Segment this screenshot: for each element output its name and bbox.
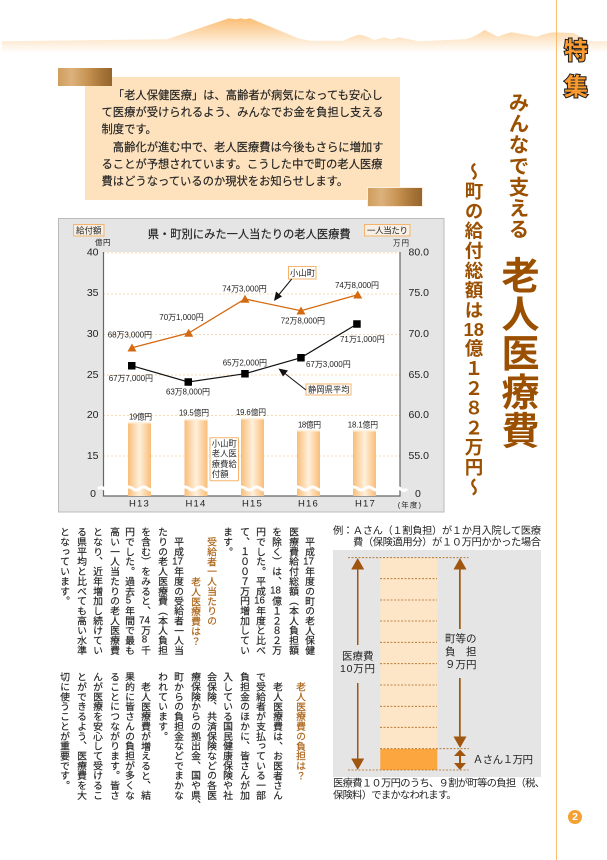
left axis labels: 35 (87, 287, 99, 299)
paragraph: 給付総額: を除く）は、 18 億１２８２万 (270, 527, 281, 655)
axis break marks (98, 487, 407, 490)
right axis legend: 一人当たり (364, 224, 410, 248)
bar value labels: 19億円 (129, 412, 152, 422)
mountain header band (2, 18, 607, 50)
data labels: 71万1,000円 (340, 335, 385, 344)
left axis labels: 25 (87, 369, 99, 381)
x axis labels: H16 (298, 498, 319, 510)
paragraph: 給付総額: る県平均と比べても高い水準 (75, 527, 86, 655)
bars: 小山町老人医療費給付額 (128, 418, 376, 496)
right axis labels: 65.0 (408, 369, 429, 381)
label: 町等の負担9万円: ９万円 (445, 659, 476, 671)
right axis labels: 80.0 (408, 247, 429, 259)
label: 町等の負担9万円: 町等の (445, 632, 476, 645)
arrow: 町等の負担 (454, 558, 466, 748)
side label: 特集 (562, 38, 590, 101)
paragraph: 給付総額: 受給者一人当たりの (205, 537, 216, 626)
callout: 小山町老人医療費給付額: 老人医 (212, 449, 237, 459)
page number (568, 810, 582, 824)
title: みんなで支える: みんなで支える (505, 92, 528, 240)
intro text: 「老人保健医療」は、高齢者が病気になっても安心し (113, 90, 383, 102)
line: 小山町 (128, 290, 362, 352)
diagram caption top: 費（保険適用分）が１０万円かかった場合 (353, 536, 542, 548)
diagram caption bottom (333, 776, 545, 802)
x axis labels (129, 498, 376, 510)
x axis labels: H15 (242, 498, 263, 510)
decorative tab bottom-right (368, 188, 422, 206)
paragraph: 負担: 老人医療費の負担は？ (294, 682, 305, 780)
intro text: 制度です。 (102, 124, 157, 136)
right axis labels: 60.0 (408, 409, 429, 421)
paragraph: 負担: 果的に皆さんの負担が多くな (123, 672, 134, 800)
paragraph: 負担: 負担金のほかに、皆さんが加 (238, 672, 249, 800)
intro text: て医療が受けられるよう、みんなでお金を負担し支える (102, 107, 384, 119)
paragraph: 給付総額: て、１００７万円増加してい (238, 527, 249, 655)
paragraph: 負担: 町からの負担金などでまかな (172, 672, 183, 800)
paragraph: 給付総額: 平成 17 年度の受給者一人当 (172, 537, 183, 655)
chart title: 県・町別にみた一人当たりの老人医療費 (148, 227, 351, 241)
callout: 小山町 (274, 266, 316, 301)
paragraph: 給付総額: 医療費給付総額（本人負担額 (287, 527, 298, 655)
callout: 静岡県平均 (278, 368, 351, 395)
bar value labels: 18.1億円 (348, 420, 378, 430)
body text: lower block (58, 672, 306, 810)
data labels: 67万7,000円 (109, 374, 153, 383)
paragraph: 負担: 老人医療費は、お医者さん (271, 682, 282, 800)
paragraph: 給付総額: を含む）をみると、 74 万 8 千 (139, 527, 150, 655)
data labels (108, 281, 385, 396)
paragraph: 負担: んが医療を安心して受けるこ (91, 672, 102, 800)
paragraph: 負担: 入している国民健康保険や社 (221, 672, 232, 800)
right axis legend: 一人当たり: 一人当たり (367, 225, 408, 235)
label: 医療費10万円: 医療費 (342, 650, 374, 663)
paragraph: 負担: われています。 (156, 672, 167, 741)
paragraph: 負担: 療保険からの拠出金、国や県、 (189, 672, 200, 810)
label: 医療費10万円: 10万円 (340, 663, 375, 675)
page number: 2 (572, 811, 578, 823)
intro text: 高齢化が進む中で、老人医療費は今後もさらに増加す (113, 142, 383, 154)
data labels: 68万3,000円 (108, 330, 152, 340)
arrow: Aさん負担 (454, 750, 466, 770)
paragraph: 給付総額: 円でした。平成 16 年度と比べ (254, 527, 265, 655)
paragraph: 給付総額: 高い一人当たりの老人医療費 (108, 527, 119, 655)
bar value labels: 19.5億円 (179, 408, 209, 418)
paragraph: 給付総額: 平成 17 年度の町の老人保健 (303, 537, 314, 655)
decorative tab top-left (58, 68, 112, 86)
intro text: 費はどうなっているのか現状をお知らせします。 (102, 176, 348, 188)
left axis labels: 0 (90, 488, 96, 500)
left axis legend: 給付額: 億円 (95, 237, 110, 247)
x axis unit: (年度) (398, 500, 422, 510)
right axis labels: 0 (415, 488, 421, 500)
vertical side rule (556, 0, 557, 860)
left axis legend: 給付額: 給付額 (76, 225, 102, 235)
data labels: 70万1,000円 (159, 313, 204, 322)
diagram caption bottom: 保険料）でまかなわれます。 (333, 788, 457, 802)
paragraph: 給付総額: となり、近年増加し続けてい (91, 527, 102, 655)
callout: 小山町老人医療費給付額: 小山町 (212, 438, 237, 448)
title: 老人医療費: 老人医療費 (495, 256, 537, 450)
left axis labels: 20 (87, 409, 99, 421)
left axis legend: 給付額 (74, 224, 110, 247)
paragraph: 給付総額: ます。 (221, 527, 232, 557)
x axis labels: H14 (185, 498, 207, 510)
arrow: 医療費 total (351, 558, 364, 770)
label: 医療費10万円 (340, 650, 375, 675)
paragraph: 給付総額: たりの老人医療費（本人負担 (156, 527, 167, 655)
body text: upper block (58, 527, 315, 655)
paragraph: 給付総額: 円でした。過去 5 年間で最も (123, 527, 134, 655)
diagram caption top: 例：Ａさん（１割負担）が１か月入院して医療 (333, 524, 541, 537)
right axis labels: 75.0 (408, 287, 429, 299)
x axis labels: H17 (355, 498, 376, 510)
label: 町等の負担9万円 (445, 632, 476, 671)
paragraph: 負担 (58, 672, 306, 810)
diagram panel (333, 550, 541, 777)
subtitle: 町の給付総額: 〜町の給付総額は 18 億１２８２万円〜 (463, 162, 484, 497)
right axis labels (408, 247, 429, 500)
label: 町等の負担9万円: 負 担 (445, 646, 476, 658)
intro panel (85, 77, 400, 200)
data labels: 65万2,000円 (223, 358, 267, 368)
callout: 小山町: 小山町 (290, 268, 316, 278)
line and bar chart (58, 218, 444, 512)
right axis legend: 一人当たり: 万円 (393, 238, 409, 248)
bar value labels: 19.6億円 (236, 407, 266, 417)
side label: 特集: 集 (564, 74, 588, 101)
right axis labels: 70.0 (408, 328, 429, 340)
left axis labels: 30 (87, 328, 99, 340)
paragraph: 負担: で受給者が支払っている一部 (254, 672, 265, 800)
data labels: 63万8,000円 (166, 388, 210, 396)
left axis labels: 15 (87, 450, 99, 462)
callout: 小山町老人医療費給付額: 付額 (212, 469, 229, 479)
paragraph: 負担: 老人医療費が増えると、結 (139, 682, 150, 800)
paragraph: 給付総額: となっています。 (58, 527, 69, 606)
data labels: 72万8,000円 (281, 316, 325, 326)
cost column (348, 558, 469, 770)
left axis labels: 40 (87, 247, 99, 259)
diagram caption top (333, 524, 542, 548)
bar value labels: 18億円 (298, 420, 321, 430)
side label: 特集: 特 (564, 38, 588, 65)
plot area (103, 252, 400, 496)
label: Aさん1万円: Ａさん１万円 (473, 754, 533, 766)
paragraph: 負担: 会保険、共済保険などの各医 (205, 672, 216, 800)
bar value labels (129, 407, 378, 430)
line: 静岡県平均 (128, 320, 361, 386)
paragraph: 負担: 切に使うことが重要です。 (58, 672, 69, 790)
callout: 小山町老人医療費給付額: 療費給 (212, 459, 237, 469)
paragraph: 給付総額: 老人医療費は？ (189, 577, 200, 646)
data labels: 67万3,000円 (306, 360, 351, 369)
paragraph: 負担: ることにつながります。皆さ (108, 672, 119, 800)
data labels: 74万3,000円 (222, 284, 267, 294)
callout: 小山町老人医療費給付額 (210, 438, 238, 481)
paragraph: 給付総額 (58, 527, 315, 655)
diagram caption bottom: 医療費１０万円のうち、９割が町等の負担（税、 (333, 776, 545, 790)
right axis labels: 55.0 (408, 450, 429, 462)
left axis labels (87, 247, 99, 500)
data labels: 74万8,000円 (335, 281, 379, 290)
intro text (102, 89, 384, 188)
callout: 静岡県平均: 静岡県平均 (308, 384, 350, 394)
chart panel background (58, 218, 444, 512)
paragraph: 負担: とができるよう、医療費を大 (75, 672, 86, 800)
x axis labels: H13 (129, 498, 150, 510)
intro text: ることが予想されています。こうした中で町の老人医療 (102, 159, 382, 171)
